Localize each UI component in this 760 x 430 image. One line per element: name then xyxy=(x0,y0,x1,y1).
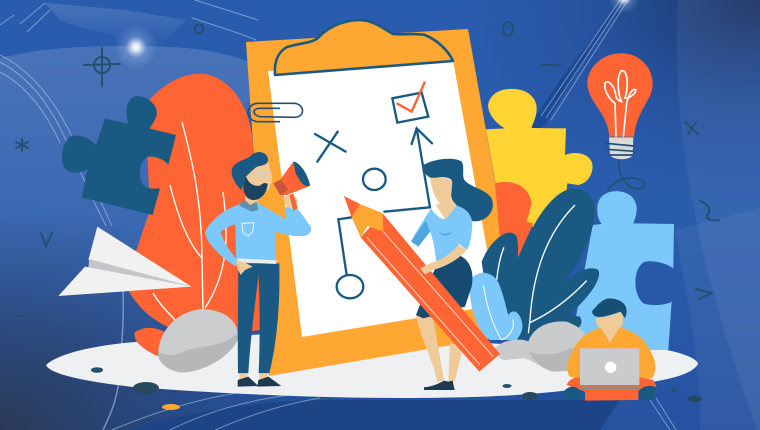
sweater xyxy=(567,327,655,379)
glasses xyxy=(257,172,272,177)
floor spots xyxy=(91,367,702,410)
light blue puzzle piece xyxy=(570,191,674,350)
asterisk xyxy=(16,139,28,151)
ankles and shoes xyxy=(238,373,281,387)
beard xyxy=(243,176,268,200)
head xyxy=(232,152,310,212)
bust shade xyxy=(439,232,452,235)
shirt xyxy=(205,203,311,267)
neck and face xyxy=(596,312,623,343)
megaphone xyxy=(273,162,310,211)
crosshair xyxy=(84,48,120,86)
sleeve shade xyxy=(411,221,430,247)
red shape behind leaves xyxy=(495,182,533,257)
pencil xyxy=(344,196,500,372)
glass xyxy=(587,53,653,137)
top xyxy=(411,206,472,263)
woman lower body xyxy=(416,255,473,390)
skirt xyxy=(416,255,473,318)
woman xyxy=(411,159,493,263)
belt xyxy=(237,258,277,264)
navy puzzle piece xyxy=(62,96,176,215)
grey rocks xyxy=(495,321,587,372)
floor ellipse xyxy=(46,332,698,398)
cord xyxy=(607,161,645,191)
hair xyxy=(423,159,493,221)
letter marks and dashes xyxy=(41,233,52,246)
hand on hip xyxy=(236,260,253,275)
woman arm holding pencil xyxy=(420,245,467,274)
checkbox with tick xyxy=(392,82,428,123)
light blue leaf xyxy=(470,273,522,340)
grey rock left xyxy=(158,309,238,372)
face xyxy=(245,162,272,195)
clipboard paper xyxy=(268,60,497,337)
orange leaf small xyxy=(135,328,175,356)
screw base xyxy=(609,137,633,159)
shoes xyxy=(564,386,656,400)
orange leaf large xyxy=(128,74,262,335)
clipboard clip xyxy=(275,20,453,75)
strategy diagram xyxy=(315,128,432,298)
laptop xyxy=(580,348,640,389)
pocket xyxy=(242,223,254,236)
navy leaves xyxy=(482,188,599,340)
hair xyxy=(232,152,268,190)
small circles xyxy=(195,22,513,36)
arrow path xyxy=(338,128,432,275)
clipboard xyxy=(246,20,522,376)
person with laptop xyxy=(564,298,657,401)
lens flare xyxy=(114,25,158,69)
legs xyxy=(567,377,657,401)
shoes xyxy=(424,381,455,390)
floating doodle marks xyxy=(16,22,719,316)
leaves and rocks right xyxy=(470,188,599,372)
man with megaphone xyxy=(205,152,311,387)
collar xyxy=(239,200,258,212)
cross mark xyxy=(315,132,346,162)
legs xyxy=(416,315,463,382)
light bulb xyxy=(587,53,653,191)
yellow puzzle piece xyxy=(486,89,593,227)
trousers xyxy=(238,263,279,373)
paper plane xyxy=(58,227,192,296)
neck and face xyxy=(430,178,458,220)
bulb filament xyxy=(605,71,636,137)
neck xyxy=(245,192,258,206)
end circle node xyxy=(337,275,363,298)
paperclip xyxy=(248,103,302,122)
hair xyxy=(592,298,627,318)
circle node xyxy=(363,169,386,190)
